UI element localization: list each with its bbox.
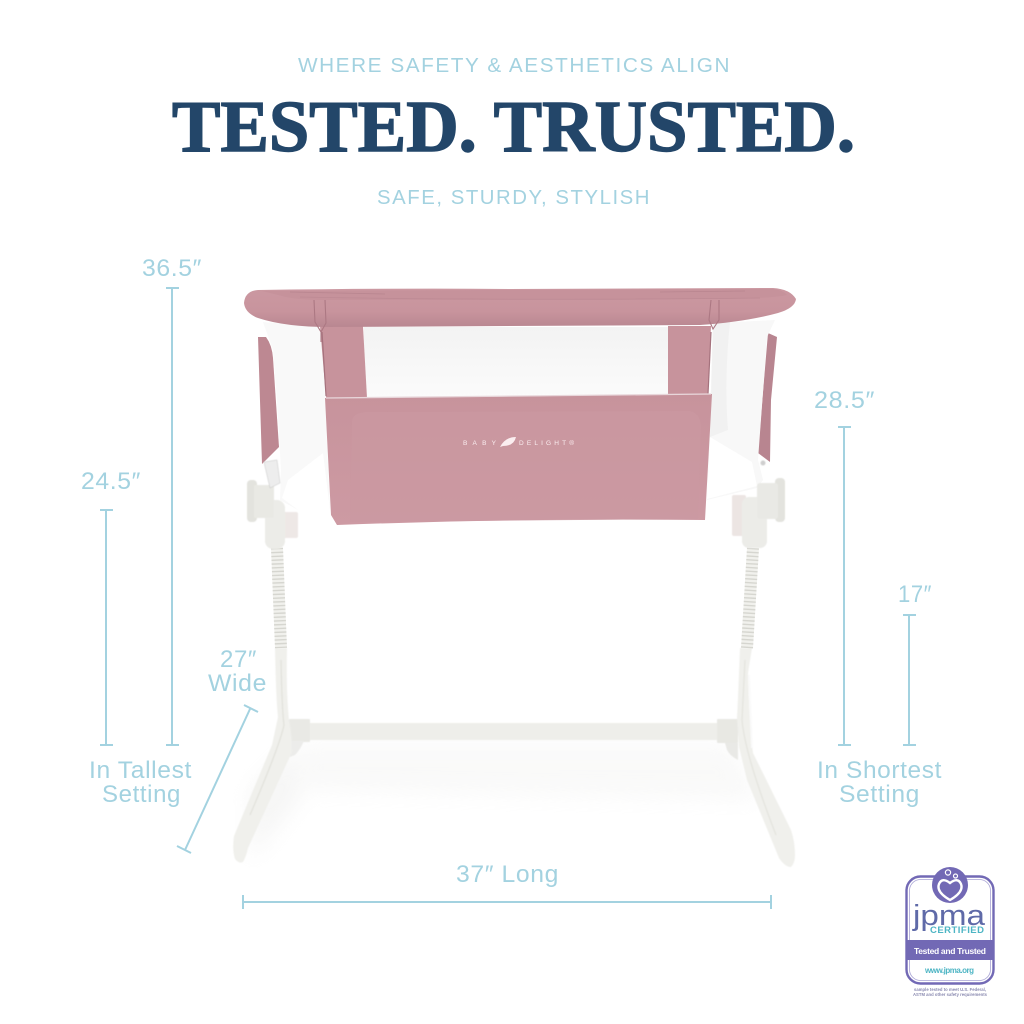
certified: CERTIFIED (930, 925, 984, 936)
right knob and bracket (732, 460, 785, 548)
dimension: 27 inch wide: 27″ (220, 646, 257, 673)
fine print: sample tested to meet U.S. Federal, (914, 987, 986, 992)
window mesh (364, 327, 669, 398)
dimension: 17 inch (898, 581, 932, 745)
dimension: 36.5 inch: 36.5″ (142, 255, 202, 282)
eyebrow heading: WHERE SAFETY & AESTHETICS ALIGN (298, 55, 731, 77)
title: TESTED. TRUSTED. (172, 86, 855, 167)
base and legs (233, 648, 795, 867)
band text: Tested and Trusted (914, 946, 986, 956)
window side panels (320, 326, 367, 398)
label: in shortest setting: Setting (839, 781, 920, 808)
label: in tallest setting: Setting (102, 781, 181, 808)
brand logo (463, 437, 574, 447)
bassinet product illustration (233, 288, 796, 867)
jpma wordmark: jpma (912, 900, 986, 932)
dimension: 37 inch long (243, 861, 771, 909)
brand logo: BABY (463, 440, 497, 447)
dimension: 37 inch long: 37″ Long (456, 861, 559, 888)
dimension: 17 inch: 17″ (898, 581, 932, 608)
fine print: ASTM and other safety requirements (913, 992, 988, 997)
side mesh (263, 322, 330, 510)
left knob and bracket (247, 460, 298, 549)
dimension: 24.5 inch: 24.5″ (81, 468, 141, 495)
brand logo: DELIGHT® (519, 439, 574, 447)
JPMA certified badge (906, 867, 994, 997)
dimension: 28.5 inch (814, 387, 875, 745)
floor shadow (250, 745, 760, 860)
dimension: 27 inch wide: Wide (208, 670, 267, 697)
fine print (913, 987, 988, 997)
mattress (282, 453, 330, 510)
label: in tallest setting (89, 757, 192, 808)
label: in shortest setting: In Shortest (817, 757, 942, 784)
website: www.jpma.org (924, 966, 974, 975)
purple band (907, 940, 993, 960)
dimension: 36.5 inch (142, 255, 202, 745)
badge frame (906, 876, 994, 984)
subheading: SAFE, STURDY, STYLISH (377, 187, 651, 209)
dimension: 24.5 inch (81, 468, 141, 745)
dimension: 27 inch wide (177, 646, 267, 853)
top rail (244, 288, 796, 327)
dimension: 28.5 inch: 28.5″ (814, 387, 875, 414)
far side pink poles (258, 337, 279, 464)
front pink panel (325, 394, 712, 525)
zippers (314, 300, 719, 342)
label: in tallest setting: In Tallest (89, 757, 192, 784)
label: in shortest setting (817, 757, 942, 808)
height-adjust springs (277, 548, 753, 648)
heart emblem (932, 867, 968, 903)
